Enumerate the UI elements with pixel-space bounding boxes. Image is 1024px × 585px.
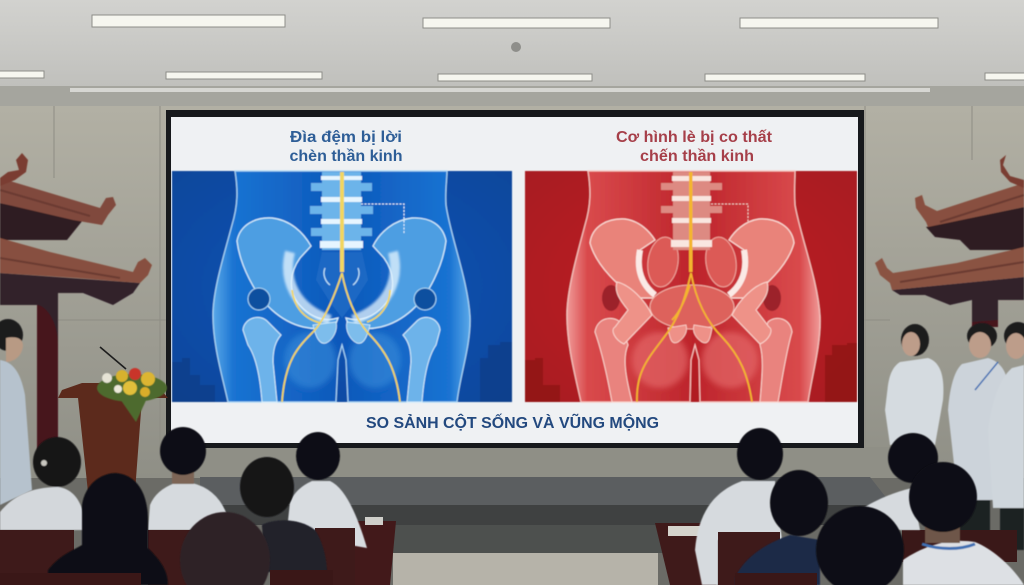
ceiling	[0, 0, 1024, 106]
body outline	[567, 171, 820, 402]
slide background	[171, 117, 858, 443]
right ilium bone	[729, 219, 794, 298]
city silhouette	[172, 342, 512, 402]
audience: back row chairs	[0, 528, 355, 585]
tables	[355, 517, 1017, 585]
dotted callout line	[711, 204, 748, 222]
front chair, right	[735, 573, 817, 585]
audience member: long-haired woman, front left	[48, 473, 168, 585]
microphone	[100, 347, 126, 369]
doctor: woman	[885, 324, 943, 445]
psoas muscles	[645, 235, 681, 289]
left subheading: chèn thần kinh	[290, 148, 402, 165]
sciatic nerves	[637, 273, 752, 402]
audience member: man with lanyard, front right	[903, 462, 1024, 585]
audience member: man, right-centre	[695, 428, 783, 585]
doctor: man right	[988, 322, 1024, 550]
stage	[200, 477, 892, 585]
city silhouette	[525, 343, 857, 402]
doctor: man centre	[948, 323, 1008, 538]
right chair	[718, 532, 780, 585]
standing doctors at right	[885, 322, 1024, 550]
panel: red pelvis illustration	[525, 171, 857, 402]
front chair, left	[0, 573, 141, 585]
flower arrangement	[97, 368, 167, 422]
left ilium bone	[590, 219, 655, 298]
audience member: woman with hair clip, left	[0, 437, 85, 530]
audience member: man, centre	[287, 432, 367, 548]
right subheading: chến thần kinh	[640, 148, 754, 165]
dotted callout line	[361, 204, 404, 233]
body outline	[213, 171, 470, 402]
lower hip shading	[632, 332, 688, 388]
right ilium bone	[346, 218, 446, 329]
hip sockets	[248, 288, 270, 310]
presenter at left	[0, 319, 32, 505]
lower hip shading	[284, 332, 336, 388]
right heading: Cơ hình lè bị co thất	[616, 129, 773, 146]
audience member: front head, right	[816, 506, 904, 585]
left pagoda roof decoration	[0, 153, 152, 450]
audience member: man, left-centre	[148, 427, 230, 530]
ischium	[668, 325, 712, 343]
femurs	[243, 317, 281, 402]
audience member: front head, bottom left	[180, 512, 270, 585]
sacrum	[316, 252, 368, 318]
audience member: woman, centre	[240, 457, 327, 572]
lumbar spine	[661, 172, 722, 250]
left heading: Đìa đệm bị lời	[290, 129, 402, 146]
femurs	[595, 318, 632, 402]
podium	[58, 383, 168, 492]
right pagoda roof decoration	[875, 155, 1024, 327]
left ilium bone	[237, 218, 338, 329]
lumbar spine	[310, 172, 373, 250]
right piriformis	[732, 282, 771, 344]
left piriformis	[613, 282, 652, 344]
sacrum muscles	[650, 285, 734, 329]
ischium	[313, 322, 370, 343]
panel: blue pelvis illustration	[172, 171, 512, 402]
deep hip muscle shading	[602, 285, 620, 311]
sciatic nerves	[282, 273, 400, 402]
audience member: man, right	[863, 433, 938, 530]
front chair, centre	[270, 570, 333, 585]
audience member: woman, right-centre	[735, 470, 828, 585]
bottom caption: SO SẢNH CỘT SỐNG VÀ VŨNG MỘNG	[366, 414, 659, 432]
projection screen	[166, 110, 864, 448]
inner bone highlights	[288, 252, 395, 320]
white bone edges	[639, 250, 745, 295]
